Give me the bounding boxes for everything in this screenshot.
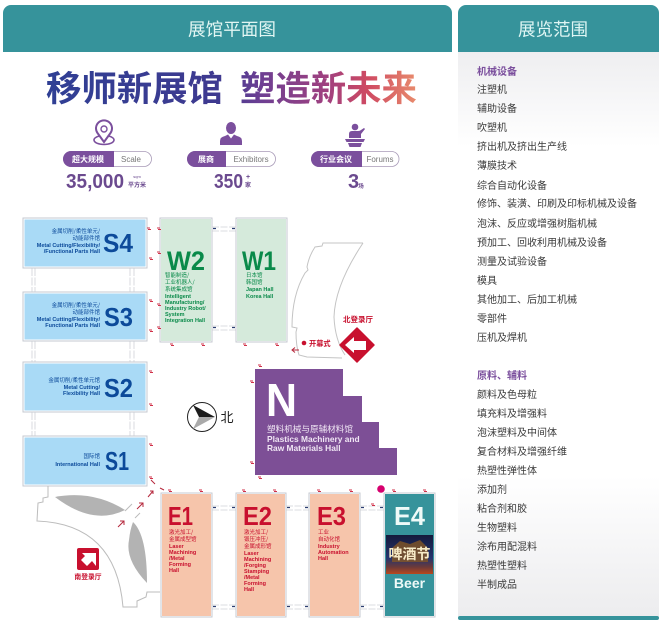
list: materials: 原料、辅料 [477,367,527,382]
hall: E2: 金属成形馆 [244,542,272,550]
list: machinery: 薄膜技术 [477,157,517,172]
hall: E2: Hall [244,587,255,593]
number: forums [348,171,364,193]
hall: S2: Metal Cutting/ [64,385,100,391]
hall: S1 [23,436,147,486]
hall: E2: 锻压冲压/ [244,535,269,543]
hall: N: Plastics Machinery and [267,434,360,444]
hall: W1: 日本馆 [246,271,263,279]
list: materials: 添加剂 [477,481,507,496]
label: north lobby: 北登录厅 [343,314,373,325]
hall: S2 [23,362,147,412]
hall: W1: W1 [242,246,276,276]
hall: S1: S1 [105,446,129,476]
hall: S4 [23,218,147,268]
hall: S2: S2 [104,373,133,403]
hall: E2: 激光加工/ [244,528,269,536]
list: materials: 热塑性塑料 [477,557,527,572]
marker: pink dot [377,485,385,493]
list: machinery: 预加工、回收利用机械及设备 [477,234,607,249]
list: materials [477,367,567,591]
hall: W2: Integration Hall [165,318,206,324]
hall: E3 [309,493,360,617]
list: machinery: 综合自动化设备 [477,177,547,192]
hall: S4: /Functional Parts Hall [44,249,100,255]
pill: forums: 行业会议 [320,154,352,165]
list: materials: 泡沫塑料及中间体 [477,424,557,439]
label: opening ceremony: 开幕式 [309,339,331,349]
hall: E2 [236,493,286,617]
hall: S4: S4 [103,228,133,258]
list: machinery [477,63,637,344]
pill: scale: 超大规模 [72,154,104,165]
icon: north lobby marker [340,328,374,362]
hall: S3: Functional Parts Hall [45,323,100,329]
list: machinery: 机械设备 [477,63,517,78]
list: machinery: 注塑机 [477,81,507,96]
label: south lobby: 南登录厅 [74,571,102,581]
list: machinery: 测量及试验设备 [477,253,547,268]
corridors between west and east halls [212,227,384,609]
hall: N [255,369,397,475]
hall: E3: Industry [318,544,341,550]
hall: E4 [384,493,435,617]
hall: S3 [23,292,147,341]
list: materials: 涂布用配混料 [477,538,537,553]
hall: W2: Industry Robot/ [165,306,206,312]
hall: S1: 国际馆 [83,452,100,460]
hall: E4: E4 [394,501,426,531]
hall: E1 [161,493,212,617]
hall: W2: Intelligent [165,294,191,300]
hall: S3: S3 [104,302,133,332]
arrows: south lobby to east halls [118,480,164,527]
panel: floor plan header [3,5,452,52]
title: 移师新展馆 [46,61,223,112]
hall: E4: Beer [394,575,426,591]
south entrance hall [37,486,160,607]
title: 塑造新未来 [240,61,417,112]
floor plan map [23,218,435,617]
number: area: 平方米 [128,180,146,189]
hall: S4: 金属切削/柔性单元/ [52,227,101,235]
stat: forums [311,124,399,193]
compass [188,402,234,432]
pill: scale: Scale [121,155,142,164]
pill: forums: Forums [366,155,394,164]
hall: N: N [266,374,297,426]
hall: W1: Japan Hall [246,287,274,293]
corridor end marks [213,228,383,606]
number: area: sqm [133,174,141,179]
list: machinery: 零部件 [477,310,507,325]
image: beer festival banner: 啤酒节 [388,544,430,564]
compass: 北 [220,407,234,426]
icon: south lobby marker [77,548,99,570]
pill: exhibitors: 展商 [198,154,214,165]
list: machinery: 其他加工、后加工机械 [477,291,577,306]
icon: person in suit [220,122,242,145]
panel: exhibition scope: 展览范围 [518,16,588,42]
panel: floor plan header: 展馆平面图 [188,16,276,42]
pill: forums [311,151,399,167]
hall: S2: Flexibility Hall [63,391,100,397]
list: machinery: 辅助设备 [477,100,517,115]
hall: E2: /Forging [244,563,266,569]
hall: S3: 金属切削/柔性单元/ [52,301,101,309]
stat: exhibitors [187,122,276,193]
hall: W2: 智能制造/ [165,271,190,279]
number: exhibitors: + [246,174,250,181]
number: area: 35,000 [66,171,124,193]
hall: E2: E2 [243,501,272,531]
hall: E1: 金属成型馆 [169,535,197,543]
list: materials: 颜料及色母粒 [477,386,537,401]
hall: E1: Forming [169,562,191,568]
hall: E2: Laser [244,551,260,557]
list: machinery: 压机及焊机 [477,329,527,344]
hall: W1: Korea Hall [246,294,274,300]
hall: E3: Automation [318,550,349,556]
hall: W2 [160,218,212,342]
hall: E2: /Metal [244,575,260,581]
hall: E3: Hall [318,556,329,562]
hall: S3: 动能部件馆 [72,308,100,316]
number: exhibitors: 350 [214,171,243,193]
corridors between south halls [32,268,134,436]
hall: E2: Stamping [244,569,269,575]
hall: W2: System [165,312,185,318]
arrow: opening ceremony entry [292,348,299,352]
panel: exhibition scope [458,5,659,620]
number: forums: 场 [358,182,364,190]
north entrance hall outline [292,243,363,358]
hall: W2: Manufacturing/ [165,300,205,306]
icon: location pin [94,120,114,144]
hall: S4: Metal Cutting/Flexibility/ [37,243,100,249]
pill: scale [63,151,152,167]
list: machinery: 泡沫、反应或增强树脂机械 [477,215,597,230]
hall: E3: 自动化馆 [318,535,341,543]
list: materials: 热塑性弹性体 [477,462,537,477]
list: materials: 半制成品 [477,576,517,591]
stat: scale [63,120,152,193]
hall: E3: E3 [317,501,346,531]
hall: W1: 韩国馆 [246,278,263,286]
hall: S3: Metal Cutting/Flexibility/ [37,317,100,323]
hall: E2: Machining [244,557,271,563]
hall: W2: W2 [167,246,205,276]
hall: S2: 金属切削/柔性单元馆 [48,376,100,384]
list: machinery: 修饰、装潢、印刷及印标机械及设备 [477,195,637,210]
list: materials: 复合材料及增强纤维 [477,443,567,458]
hall: N: Raw Materials Hall [267,443,341,453]
list: materials: 生物塑料 [477,519,517,534]
hall: E1: Hall [169,568,180,574]
hall: W1 [236,218,287,342]
hall: E1: 激光加工/ [169,528,194,536]
hall: E3: 工业 [318,528,330,536]
list: machinery: 模具 [477,272,497,287]
list: machinery: 挤出机及挤出生产线 [477,138,567,153]
hall: W2: 系统集成馆 [165,285,193,293]
hall: E2: Forming [244,581,266,587]
number: exhibitors: 家 [245,180,251,189]
list: materials: 粘合剂和胶 [477,500,527,515]
hall: S4: 动能部件馆 [72,234,100,242]
hall: E1: Laser [169,544,185,550]
hall: E1: /Metal [169,556,185,562]
hall: S1: International Hall [55,462,100,468]
hall: N: 塑料机械与原辅材料馆 [267,423,353,435]
list: materials: 填充料及增强料 [477,405,547,420]
title [46,61,417,112]
pill: exhibitors: Exhibitors [233,155,269,164]
hall: E1: Machining [169,550,196,556]
list: machinery: 吹塑机 [477,119,507,134]
number: forums: 3 [348,171,359,193]
hall access marks [147,228,427,506]
icon: speaker at lectern [345,124,365,147]
hall: W2: 工业机器人/ [165,278,196,286]
pill: exhibitors [187,151,276,167]
hall: E1: E1 [168,501,193,531]
